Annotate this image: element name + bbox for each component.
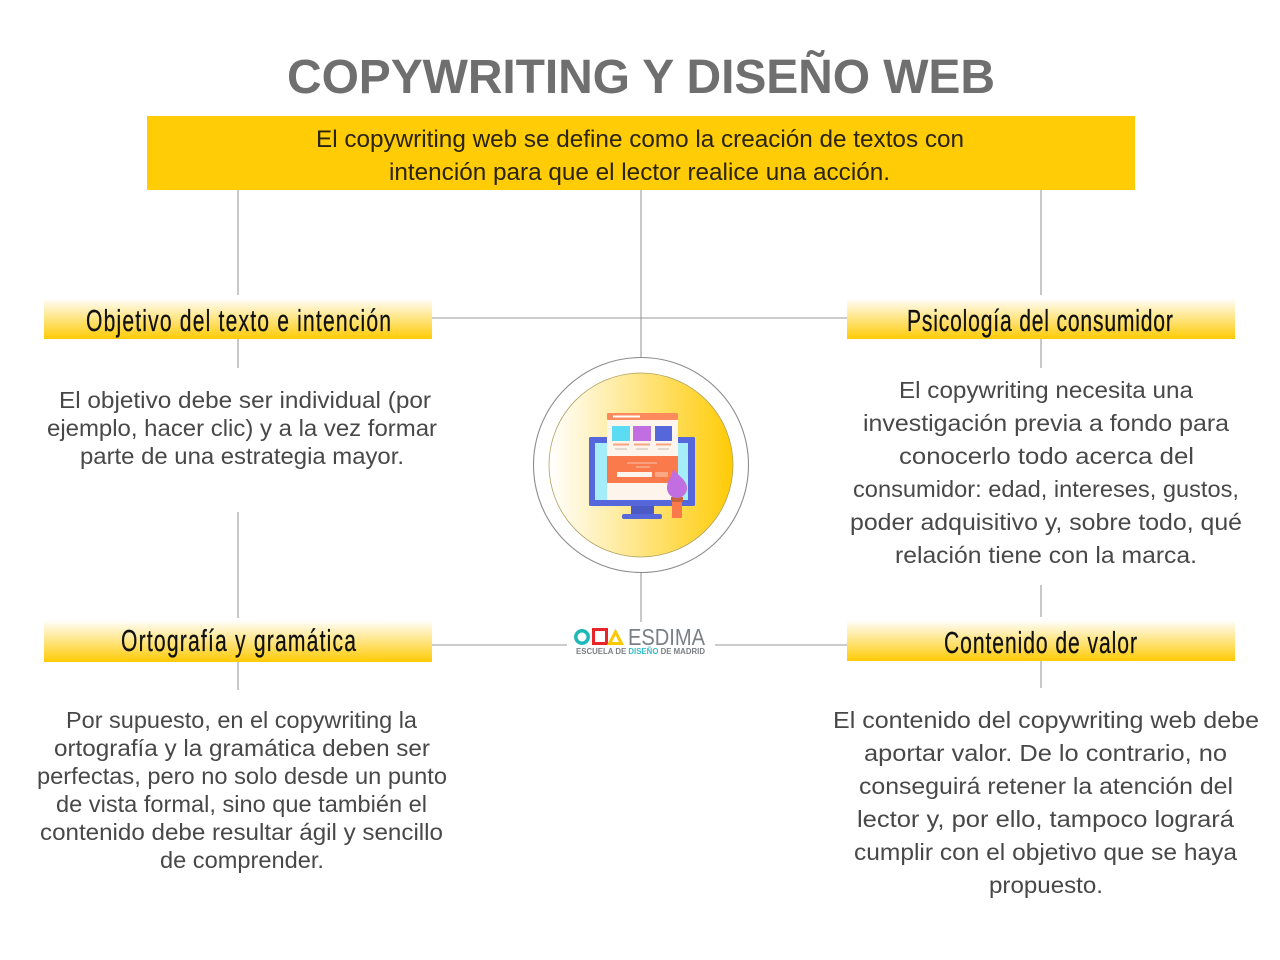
heading: contenido: [847, 620, 1235, 661]
text block: contenido: aportar valor. De lo contrario, no: [864, 740, 1227, 766]
text block: psicología: relación tiene con la marca.: [895, 542, 1197, 568]
panel: psicología del consumidor: [847, 298, 1242, 568]
text block: psicología: poder adquisitivo y, sobre todo, qué: [850, 509, 1242, 535]
logo tagline: ESCUELA DE DISEÑO DE MADRID: [576, 647, 705, 656]
text block: contenido: conseguirá retener la atención del: [859, 773, 1233, 799]
text block: ortografía: perfectas, pero no solo desde un punto: [37, 763, 447, 789]
text block: contenido: [833, 707, 1259, 898]
heading: psicología: Psicología del consumidor: [907, 303, 1173, 338]
heading: objetivo: Objetivo del texto e intención: [86, 303, 391, 338]
heading: psicología: [847, 298, 1235, 339]
text block: psicología: investigación previa a fondo para: [863, 410, 1229, 436]
panel: ortografía y gramática: [37, 620, 447, 873]
text block: objetivo: El objetivo debe ser individual (por: [59, 387, 431, 413]
text block: ortografía: contenido debe resultar ágil y sencillo: [40, 819, 443, 845]
text block: ortografía: de comprender.: [160, 847, 324, 873]
panel: contenido de valor: [833, 620, 1259, 898]
logo: ESDIMA: [576, 624, 706, 656]
heading: ortografía: [44, 620, 432, 662]
banner text: El copywriting web se define como la creación de textos con: [316, 126, 964, 153]
text block: ortografía: ortografía y la gramática deben ser: [54, 735, 430, 761]
logo mark: [576, 630, 622, 644]
text block: ortografía: [37, 707, 447, 873]
banner text: intención para que el lector realice una acción.: [389, 159, 890, 186]
title: COPYWRITING Y DISEÑO WEB: [287, 49, 995, 104]
heading: contenido: Contenido de valor: [944, 625, 1137, 660]
text block: psicología: El copywriting necesita una: [899, 377, 1193, 403]
heading: ortografía: Ortografía y gramática: [121, 623, 356, 658]
text block: objetivo: parte de una estrategia mayor.: [80, 443, 404, 469]
text block: contenido: propuesto.: [989, 872, 1103, 898]
icon: monitor with web page and brush: [589, 413, 695, 519]
text block: contenido: El contenido del copywriting web debe: [833, 707, 1259, 733]
logo wordmark: ESDIMA: [628, 624, 706, 650]
text block: contenido: lector y, por ello, tampoco logrará: [857, 806, 1234, 832]
text block: ortografía: de vista formal, sino que también el: [56, 791, 427, 817]
text block: psicología: conocerlo todo acerca del: [899, 443, 1194, 469]
central circle with web design icon: [534, 358, 748, 572]
heading: objetivo: [44, 298, 432, 339]
panel: definition banner: [147, 116, 1135, 190]
text block: psicología: consumidor: edad, intereses, gustos,: [853, 476, 1239, 502]
text block: contenido: cumplir con el objetivo que se haya: [854, 839, 1237, 865]
text block: ortografía: Por supuesto, en el copywriting la: [66, 707, 417, 733]
panel: objetivo del texto: [44, 298, 437, 469]
text block: objetivo: [47, 387, 437, 469]
text block: psicología: [850, 377, 1242, 568]
text block: objetivo: ejemplo, hacer clic) y a la vez formar: [47, 415, 437, 441]
banner text: [316, 126, 964, 186]
